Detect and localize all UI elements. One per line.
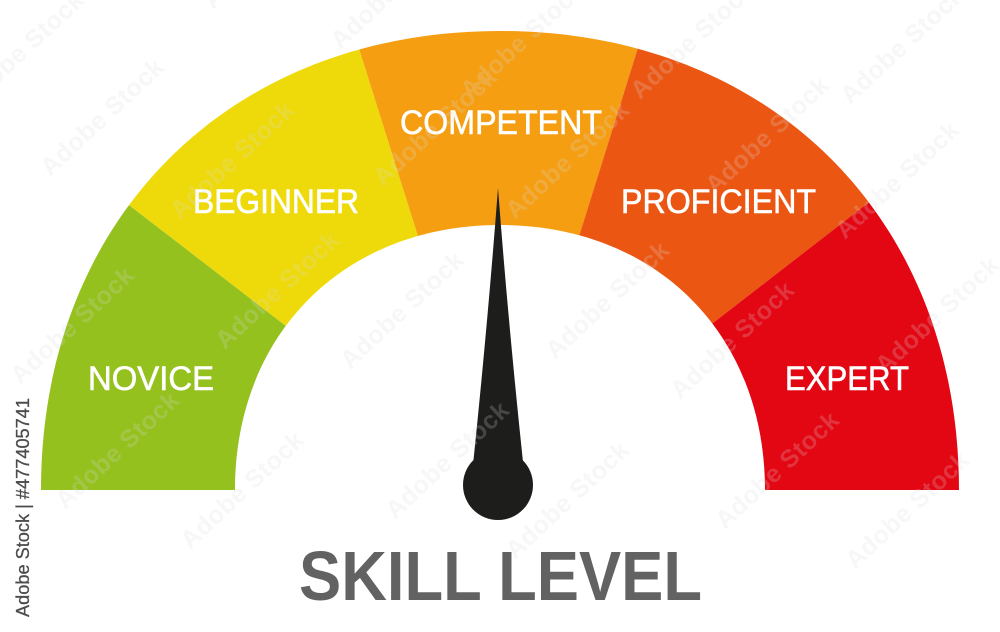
stock image credit: Adobe Stock | #477405741 xyxy=(13,398,33,617)
label: expert: EXPERT xyxy=(785,360,909,398)
label: proficient: PROFICIENT xyxy=(621,183,816,221)
stock watermarks: Adobe Stock xyxy=(500,96,635,224)
label: novice: NOVICE xyxy=(88,360,214,398)
segment labels xyxy=(88,104,909,398)
title: SKILL LEVEL xyxy=(299,537,702,615)
gauge needle xyxy=(463,188,533,520)
stock watermarks: Adobe Stock xyxy=(335,246,470,374)
segment: proficient xyxy=(579,48,869,324)
stock watermarks: Adobe Stock xyxy=(165,96,300,224)
stock watermarks: Adobe Stock xyxy=(380,396,515,524)
stock watermarks: Adobe Stock xyxy=(210,226,345,354)
stock watermarks: Adobe Stock xyxy=(710,406,845,534)
stock watermarks: Adobe Stock xyxy=(540,236,675,364)
stock watermarks: Adobe Stock xyxy=(700,71,835,199)
stock watermarks: Adobe Stock xyxy=(665,276,800,404)
gauge arc xyxy=(41,31,959,490)
stock watermarks: Adobe Stock xyxy=(5,261,140,389)
stock watermarks: Adobe Stock xyxy=(35,53,170,181)
stock watermarks: Adobe Stock xyxy=(840,446,975,574)
stock watermarks: Adobe Stock xyxy=(50,386,185,514)
label: beginner: BEGINNER xyxy=(193,183,359,221)
stock watermarks: Adobe Stock xyxy=(830,116,965,244)
segment: competent xyxy=(359,31,638,236)
stock watermarks: Adobe Stock xyxy=(175,426,310,554)
segment: beginner xyxy=(129,50,418,326)
segment: novice xyxy=(41,205,286,490)
segment: expert xyxy=(712,202,959,490)
label: competent: COMPETENT xyxy=(400,104,602,142)
stock watermarks: Adobe Stock xyxy=(500,436,635,564)
stock watermarks: Adobe Stock xyxy=(368,63,503,191)
